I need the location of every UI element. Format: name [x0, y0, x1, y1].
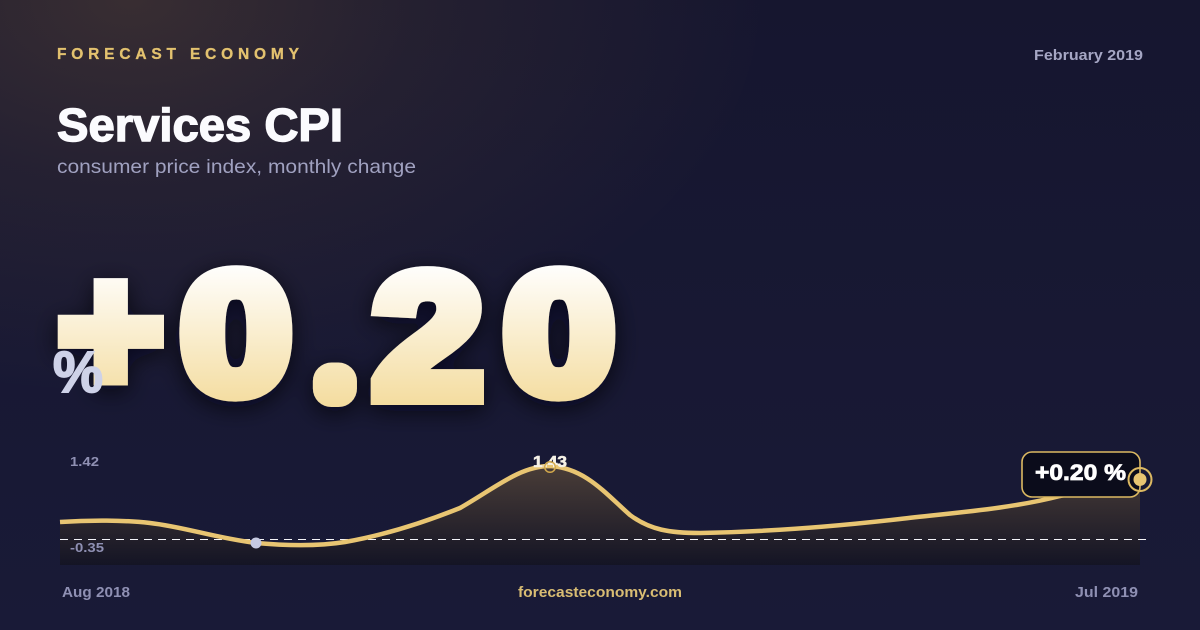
title: Services CPI	[57, 99, 343, 151]
start date: Aug 2018	[62, 585, 130, 601]
current point marker	[1128, 468, 1152, 491]
chart area fill	[60, 466, 1140, 565]
peak marker	[545, 462, 555, 472]
chart area base	[60, 466, 1140, 565]
area chart	[60, 466, 1147, 565]
current value callout: +0.20 %	[1035, 460, 1126, 485]
peak value label: 1.43	[533, 454, 567, 471]
big value: 0	[504, 239, 614, 429]
website: forecasteconomy.com	[518, 585, 682, 601]
big value: 0	[181, 239, 291, 429]
current value callout	[1022, 452, 1140, 497]
chart line	[60, 466, 1140, 545]
baseline dashed	[60, 538, 1147, 540]
brand heading: FORECAST ECONOMY	[57, 46, 300, 63]
low point marker	[250, 538, 262, 548]
big value: 2	[373, 237, 483, 435]
big value: .	[328, 344, 342, 400]
big value: +	[57, 226, 164, 432]
axis min label: -0.35	[70, 540, 104, 555]
date: February 2019	[1034, 47, 1143, 64]
axis max label: 1.42	[70, 454, 99, 469]
end date: Jul 2019	[1075, 585, 1138, 601]
subtitle: consumer price index, monthly change	[57, 156, 416, 178]
big value	[57, 226, 614, 435]
percent unit: %	[53, 340, 103, 405]
